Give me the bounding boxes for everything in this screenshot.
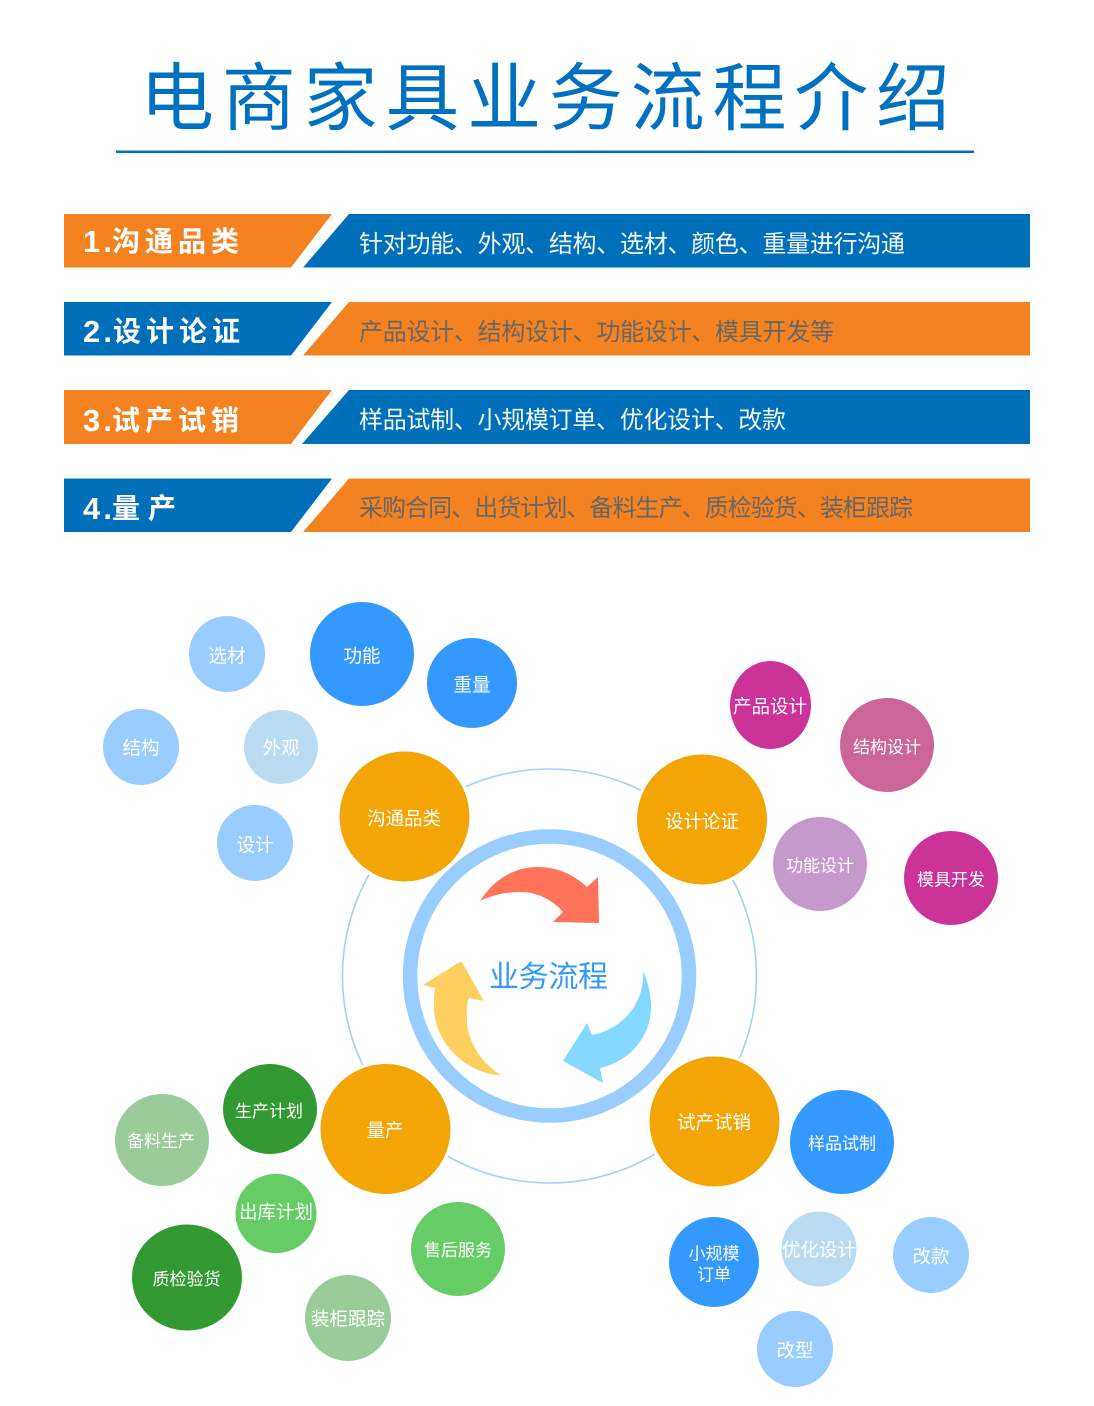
banner 1: 沟通品类: 1. — [83, 224, 112, 259]
bubble: 重量 — [427, 638, 517, 728]
bubble: 结构设计 — [840, 698, 934, 792]
bubble: 选材 — [189, 616, 265, 692]
topic cluster: 沟通品类 — [103, 602, 517, 882]
bubble: 外观 — [244, 710, 318, 784]
bubble: 售后服务 — [411, 1202, 505, 1296]
hub: 量产 — [320, 1064, 450, 1194]
bubble: 样品试制 — [790, 1090, 894, 1194]
hub: 设计论证: 设计论证 — [665, 811, 739, 832]
title: 电商家具业务流程介绍 — [140, 57, 950, 140]
banner 2: 设计论证 — [64, 302, 1030, 356]
bubble: 改型 — [757, 1311, 833, 1387]
bubble: 出库计划: 出库计划 — [239, 1202, 313, 1222]
banner 1: 沟通品类: 沟通品类 — [112, 226, 239, 257]
arrow: cyan — [563, 971, 651, 1083]
bubble: 装柜跟踪: 装柜跟踪 — [311, 1308, 385, 1330]
bubble: 模具开发 — [904, 831, 998, 925]
bubble: 功能设计: 功能设计 — [786, 856, 854, 876]
bubble: 产品设计: 产品设计 — [733, 696, 807, 717]
bubble: 改型: 改型 — [776, 1340, 814, 1361]
hub: 试产试销 — [650, 1056, 780, 1186]
banner 1: 沟通品类 — [64, 214, 1030, 268]
banner 3: 试产试销: 3. — [83, 403, 112, 438]
banner 4: 量产: 4. — [83, 491, 112, 526]
topic cluster: 设计论证 — [637, 661, 998, 925]
topic cluster: 试产试销 — [650, 1056, 969, 1387]
bubble: 功能设计 — [773, 817, 867, 911]
bubble: 改款: 改款 — [912, 1246, 950, 1267]
bubble: 装柜跟踪 — [305, 1275, 391, 1361]
central thick ring — [410, 836, 689, 1116]
banner 2: 设计论证: 设计论证 — [113, 316, 240, 347]
bubble: 改款 — [893, 1217, 969, 1293]
bubble: 小规模订单 — [669, 1217, 759, 1307]
bubble: 外观: 外观 — [262, 738, 300, 758]
bubble: 生产计划 — [223, 1064, 317, 1154]
hub: 试产试销: 试产试销 — [677, 1112, 751, 1133]
bubble: 结构 — [103, 709, 179, 785]
bubble: 质检验货: 质检验货 — [152, 1270, 220, 1289]
bubble: 备料生产: 备料生产 — [127, 1132, 195, 1151]
banner 4: 量产: 量产 — [112, 493, 176, 524]
center label: 业务流程 — [489, 961, 608, 994]
banner 2: 设计论证: 产品设计、结构设计、功能设计、模具开发等 — [359, 319, 834, 346]
bubble: 小规模订单: 小规模 — [688, 1244, 740, 1264]
bubble: 售后服务: 售后服务 — [424, 1241, 492, 1260]
bubble: 优化设计 — [782, 1212, 856, 1286]
bubble: 重量: 重量 — [453, 674, 491, 696]
bubble: 设计 — [217, 805, 293, 881]
bubble: 备料生产 — [115, 1094, 209, 1186]
bubble: 设计: 设计 — [236, 834, 274, 856]
banner 3: 试产试销: 试产试销 — [112, 405, 239, 436]
hub: 设计论证 — [637, 754, 767, 884]
bubble: 结构: 结构 — [122, 738, 160, 758]
arrow: yellow — [423, 962, 501, 1075]
banner 4: 量产: 采购合同、出货计划、备料生产、质检验货、装柜跟踪 — [359, 495, 913, 522]
hub: 沟通品类 — [340, 752, 470, 882]
banner 4: 量产 — [64, 478, 1030, 532]
bubble: 选材: 选材 — [208, 646, 246, 666]
hub: 沟通品类: 沟通品类 — [367, 808, 441, 829]
arrow: red — [480, 867, 599, 923]
topic cluster: 量产 — [115, 1064, 505, 1361]
bubble: 结构设计: 结构设计 — [853, 738, 921, 757]
bubble: 模具开发: 模具开发 — [917, 870, 985, 890]
bubble: 样品试制: 样品试制 — [808, 1134, 876, 1154]
hub: 量产: 量产 — [366, 1120, 404, 1141]
outer thin ring — [342, 769, 756, 1183]
bubble: 质检验货 — [132, 1224, 242, 1330]
bubble: 出库计划 — [236, 1174, 316, 1253]
bubble: 优化设计: 优化设计 — [782, 1240, 856, 1260]
bubble: 功能 — [310, 602, 414, 706]
banner 3: 试产试销 — [64, 390, 1030, 444]
bubble: 小规模订单: 订单 — [697, 1266, 731, 1284]
bubble: 产品设计 — [730, 661, 811, 749]
banner 1: 沟通品类: 针对功能、外观、结构、选材、颜色、重量进行沟通 — [359, 231, 905, 258]
bubble: 生产计划: 生产计划 — [235, 1102, 303, 1121]
banner 3: 试产试销: 样品试制、小规模订单、优化设计、改款 — [359, 407, 786, 434]
bubble: 功能: 功能 — [343, 646, 381, 666]
banner 2: 设计论证: 2. — [83, 314, 112, 349]
